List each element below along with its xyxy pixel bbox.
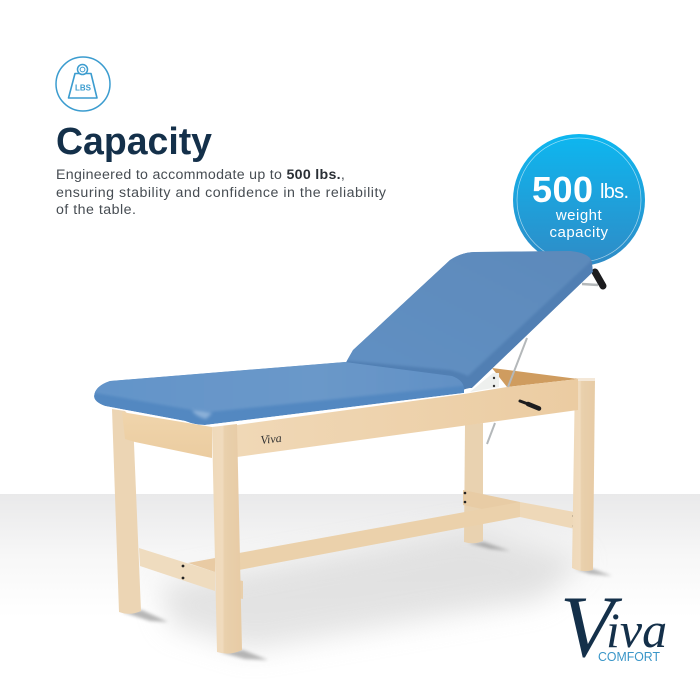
logo: Viva Comfort: iva	[606, 602, 667, 658]
backrest cushion	[340, 245, 600, 390]
long stretcher	[239, 502, 520, 570]
seat cushion	[94, 362, 464, 425]
icon: weight: LBS	[75, 84, 92, 92]
badge: 500 lbs weight capacity	[513, 134, 645, 266]
logo: Viva Comfort: V	[560, 579, 614, 676]
inner frame	[492, 368, 578, 387]
right stretcher	[520, 502, 580, 530]
badge: 500 lbs weight capacity: 500	[532, 169, 593, 210]
long side rail	[237, 379, 578, 457]
badge: 500 lbs weight capacity: capacity	[549, 224, 609, 241]
text block: description: Engineered to accommodate up to 500 lbs.,	[56, 167, 345, 183]
left stretcher	[139, 548, 243, 599]
text block: description: of the table.	[56, 202, 136, 218]
brand mark on rail: Viva	[260, 431, 282, 447]
rear left leg	[112, 409, 141, 614]
title: Capacity	[56, 121, 212, 163]
logo: Viva Comfort	[560, 579, 667, 676]
crank handle	[520, 401, 539, 408]
right front leg	[572, 378, 595, 571]
support rod	[487, 338, 527, 444]
text block: description: ensuring stability and confidence in the reliability	[56, 185, 387, 201]
rear cross stretcher	[463, 490, 520, 517]
badge: 500 lbs weight capacity: lbs.	[600, 181, 629, 203]
text block: description	[56, 167, 387, 218]
front left leg	[212, 424, 242, 654]
rear right leg	[464, 423, 483, 543]
bracket	[470, 373, 499, 392]
background floor	[0, 494, 700, 700]
table	[90, 245, 603, 654]
left end rail	[122, 412, 212, 458]
logo: Viva Comfort: COMFORT	[598, 649, 660, 664]
icon: weight	[56, 57, 110, 111]
headrest rod and handle	[582, 272, 603, 286]
badge: 500 lbs weight capacity: weight	[555, 207, 603, 224]
floor shadows	[122, 530, 612, 660]
